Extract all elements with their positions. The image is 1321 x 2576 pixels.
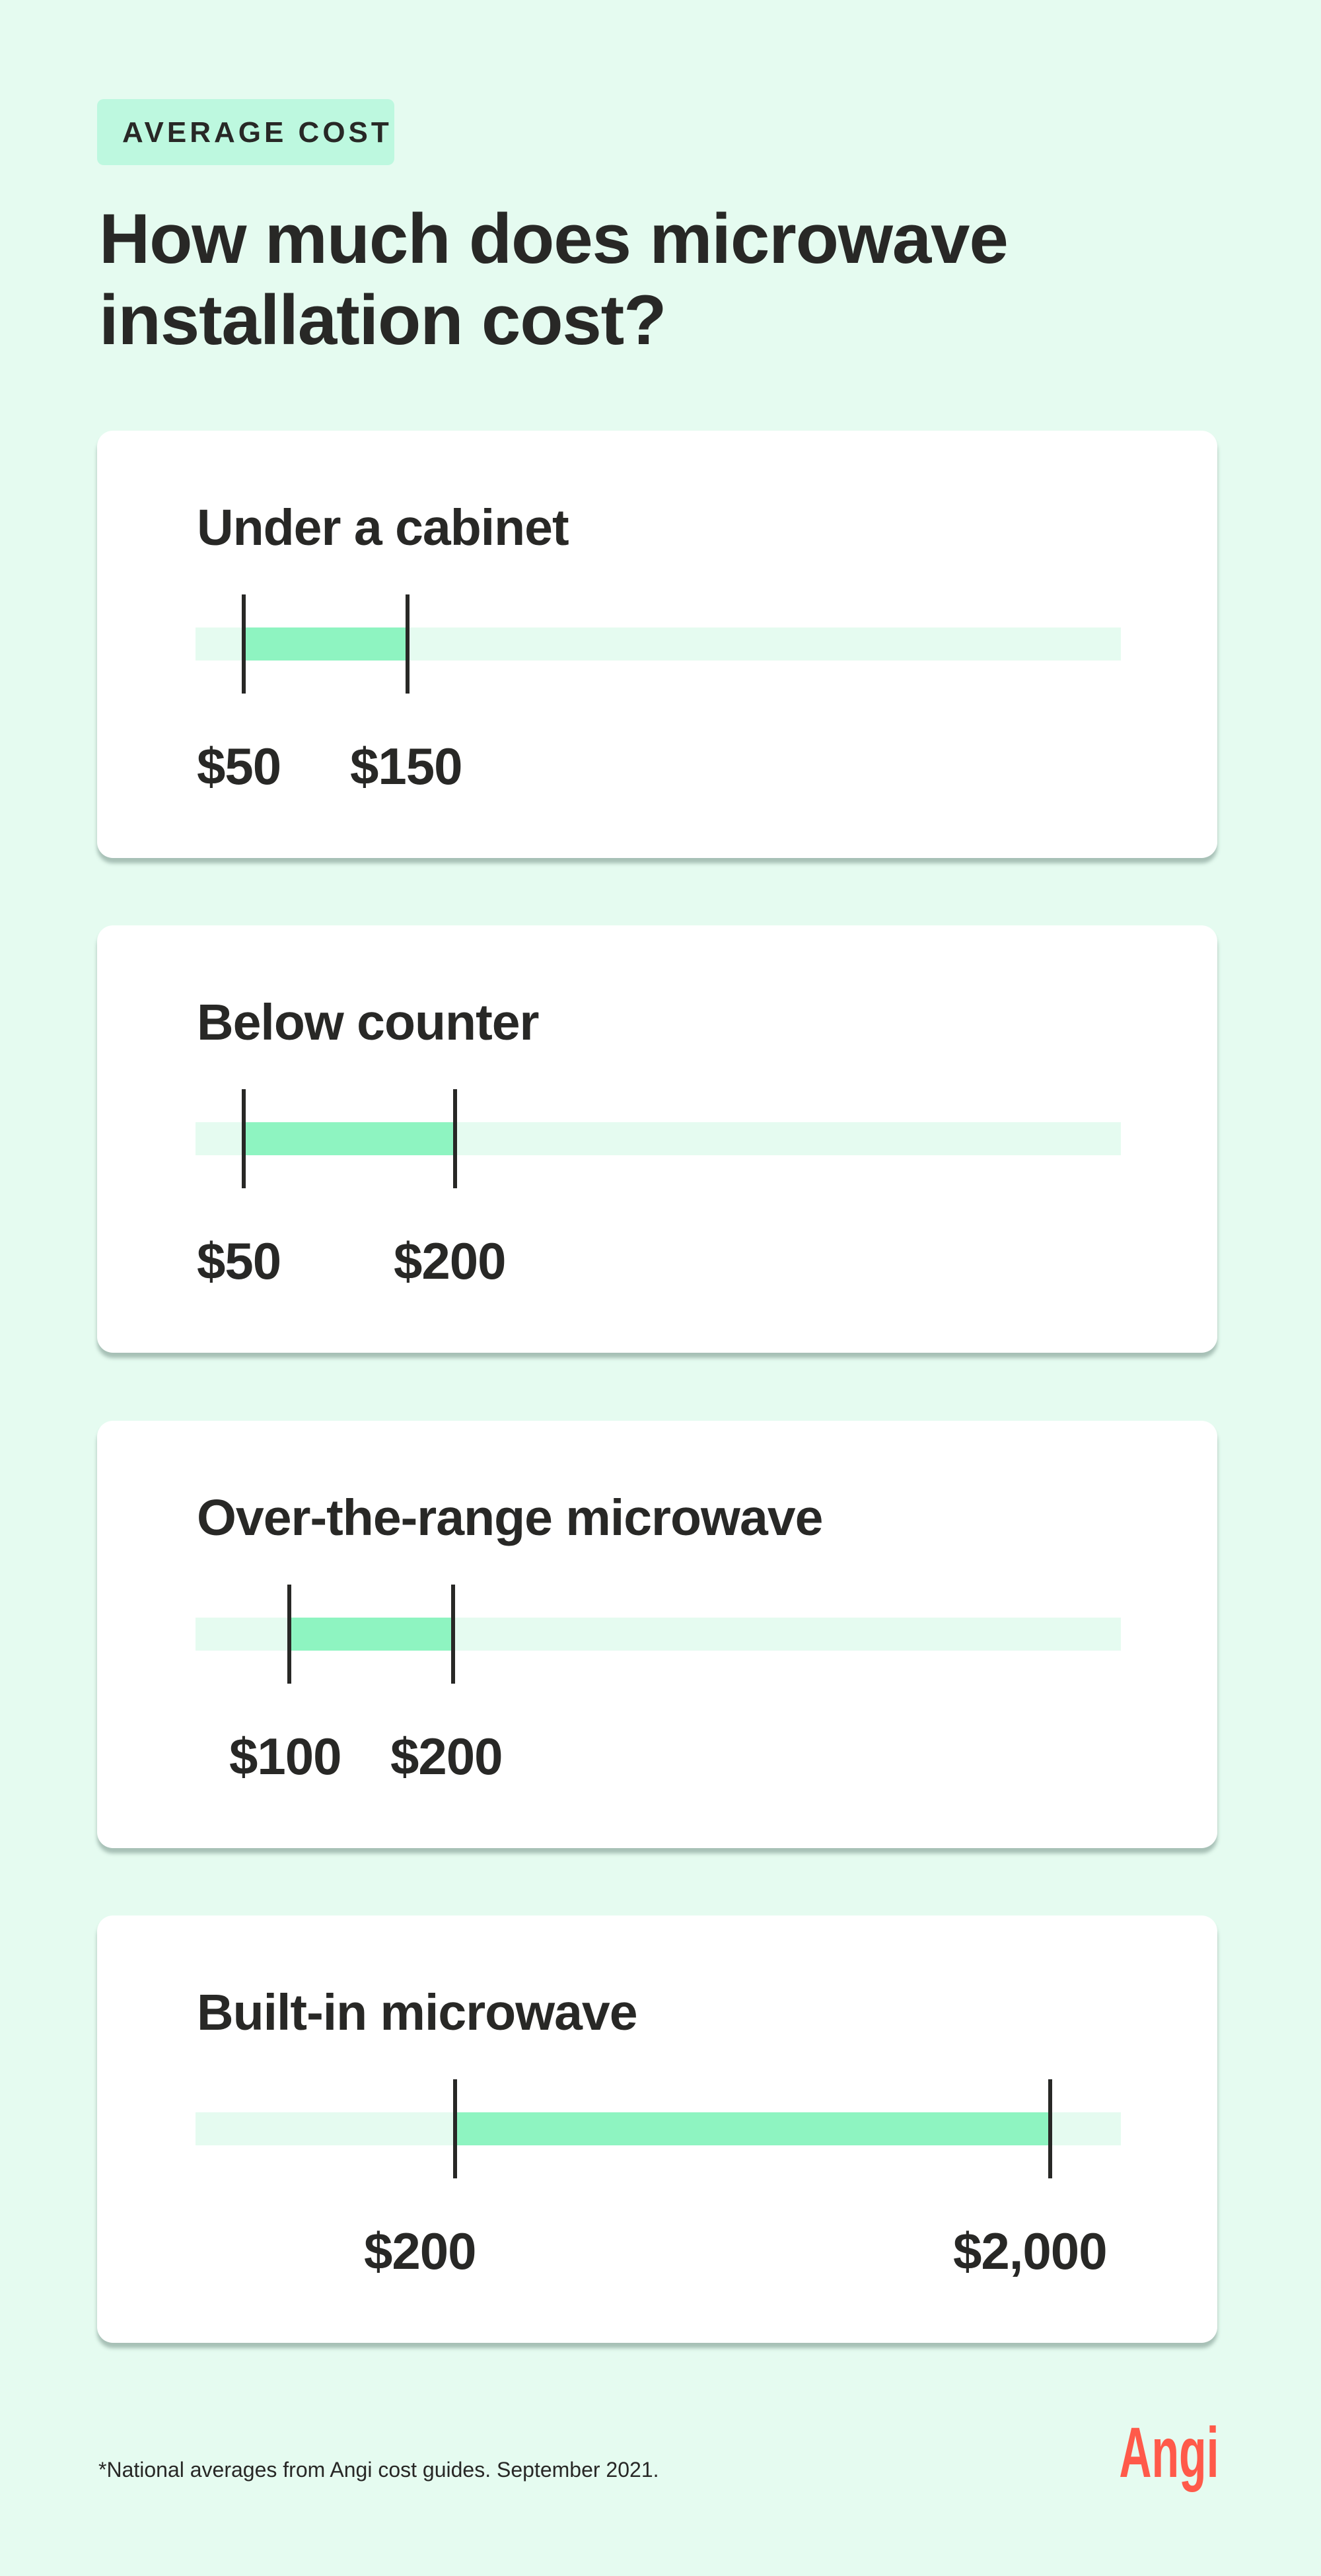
label: $200: $200 <box>390 1727 503 1785</box>
footnote: *National averages from Angi cost guides. September 2021. <box>98 2458 659 2482</box>
panel: over-the-range microwave <box>97 1421 1217 1848</box>
panel: under a cabinet <box>97 431 1217 858</box>
tag: average cost: AVERAGE COST <box>122 116 392 149</box>
heading: below counter: Below counter <box>197 994 539 1051</box>
label: $200: $200 <box>364 2222 476 2280</box>
label: $200: $200 <box>394 1232 506 1290</box>
label: $2,000: $2,000 <box>953 2222 1107 2280</box>
label: $150: $150 <box>350 737 462 795</box>
tag: average cost <box>97 99 394 165</box>
heading: under a cabinet: Under a cabinet <box>197 499 569 556</box>
panel: below counter <box>97 925 1217 1353</box>
heading: built-in microwave: Built-in microwave <box>197 1984 637 2041</box>
title: How much does microwave <box>99 199 1008 278</box>
range bar: below counter <box>196 1089 1121 1188</box>
panel: built-in microwave <box>97 1915 1217 2343</box>
range bar: built-in <box>196 2079 1121 2178</box>
label: $50: $50 <box>197 1232 281 1290</box>
range bar: under a cabinet <box>196 594 1121 694</box>
range bar: over-the-range <box>196 1585 1121 1684</box>
heading: over-the-range microwave: Over-the-range microwave <box>197 1489 822 1546</box>
label: $100: $100 <box>229 1727 341 1785</box>
title: installation cost? <box>99 280 666 359</box>
title <box>99 199 1008 359</box>
label: $50: $50 <box>197 737 281 795</box>
